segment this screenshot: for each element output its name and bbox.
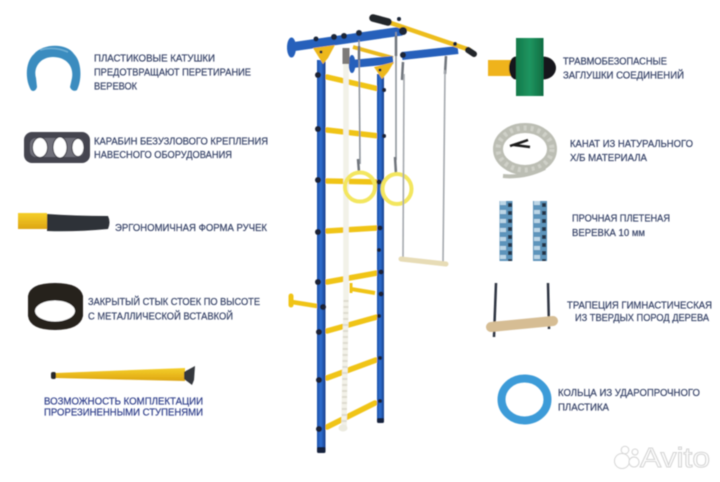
right post foot bbox=[377, 418, 384, 423]
icon: metal insert ring bbox=[28, 283, 83, 330]
icon: blue plastic ring bbox=[502, 378, 548, 420]
text: rubberized rungs: ВОЗМОЖНОСТЬ КОМПЛЕКТАЦИИ bbox=[44, 396, 203, 408]
text: safety plugs: ЗАГЛУШКИ СОЕДИНЕНИЙ bbox=[563, 68, 684, 82]
text: braided cord: ВЕРЕВКА 10 мм bbox=[572, 228, 645, 239]
text: post joint: ЗАКРЫТЫЙ СТЫК СТОЕК ПО ВЫСОТЕ bbox=[88, 295, 260, 308]
gymnastic rings bbox=[345, 172, 412, 204]
upper long blue bar bbox=[291, 31, 402, 47]
icon: safety plugs on green post bbox=[488, 38, 556, 96]
text: plastic reels: ПРЕДОТВРАЩАЮТ ПЕРЕТИРАНИЕ bbox=[94, 68, 251, 78]
text: trapeze: ТРАПЕЦИЯ ГИМНАСТИЧЕСКАЯ bbox=[567, 300, 712, 312]
icon: wooden trapeze bbox=[491, 283, 553, 337]
yellow gusset left bbox=[313, 45, 335, 64]
text: trapeze: ИЗ ТВЕРДЫХ ПОРОД ДЕРЕВА bbox=[575, 313, 709, 324]
carabiners on cords bbox=[358, 36, 446, 174]
rear yellow brace bbox=[353, 47, 393, 58]
watermark: Avito bbox=[614, 442, 710, 473]
right column icons bbox=[488, 38, 556, 420]
text: plastic rings: ПЛАСТИКА bbox=[558, 402, 609, 414]
icon: rubberized rung bbox=[51, 366, 195, 385]
swing seat bbox=[401, 259, 446, 264]
text: cotton rope: КАНАТ ИЗ НАТУРАЛЬНОГО bbox=[570, 139, 693, 150]
text: rubberized rungs: ПРОРЕЗИНЕННЫМИ СТУПЕНЯМИ bbox=[44, 408, 203, 418]
pull-up bar end cap bbox=[468, 50, 474, 54]
folding side handle, right bbox=[351, 283, 375, 293]
central product: wall bars climbing frame bbox=[287, 17, 474, 453]
left column icons bbox=[18, 46, 195, 385]
captions bbox=[44, 54, 712, 418]
folding side handle, left bbox=[291, 296, 317, 306]
wall flange bbox=[287, 38, 296, 58]
text: braided cord: ПРОЧНАЯ ПЛЕТЕНАЯ bbox=[572, 214, 670, 224]
text: carabiner: НАВЕСНОГО ОБОРУДОВАНИЯ bbox=[94, 150, 232, 161]
climbing rope bbox=[338, 48, 350, 432]
text: plastic reels: ВЕРЕВОК bbox=[94, 82, 137, 92]
text: plastic reels: ПЛАСТИКОВЫЕ КАТУШКИ bbox=[94, 54, 215, 64]
left post bbox=[317, 60, 326, 451]
text: handles: ЭРГОНОМИЧНАЯ ФОРМА РУЧЕК bbox=[115, 223, 267, 234]
pull-up bar black grip bbox=[373, 18, 388, 22]
post bolts bbox=[315, 72, 386, 432]
wall bar rungs bbox=[327, 77, 379, 427]
text: plastic rings: КОЛЬЦА ИЗ УДАРОПРОЧНОГО bbox=[558, 388, 700, 399]
text: safety plugs: ТРАВМОБЕЗОПАСНЫЕ bbox=[563, 56, 667, 68]
text: carabiner: КАРАБИН БЕЗУЗЛОВОГО КРЕПЛЕНИЯ bbox=[94, 136, 268, 148]
text: cotton rope: Х/Б МАТЕРИАЛА bbox=[570, 153, 647, 164]
icon: plastic reel bbox=[27, 46, 80, 91]
pull-up bar yellow bbox=[385, 21, 470, 50]
right post bbox=[377, 74, 384, 421]
left post foot bbox=[317, 447, 326, 453]
icon: braided cords bbox=[503, 201, 544, 261]
icon: carabiner plate bbox=[24, 132, 90, 163]
text: post joint: С МЕТАЛЛИЧЕСКОЙ ВСТАВКОЙ bbox=[88, 310, 233, 322]
icon: handle bbox=[18, 213, 110, 231]
swing ropes bbox=[403, 70, 445, 263]
watermark dots bbox=[614, 446, 639, 468]
lower blue bar bbox=[352, 50, 458, 64]
watermark wordmark: Avito bbox=[640, 442, 710, 473]
icon: cotton rope coil bbox=[498, 128, 552, 176]
lower bar flange bbox=[348, 55, 356, 73]
yellow gusset right bbox=[374, 62, 394, 79]
frame joints bbox=[314, 17, 457, 72]
ring cords bbox=[359, 32, 396, 164]
